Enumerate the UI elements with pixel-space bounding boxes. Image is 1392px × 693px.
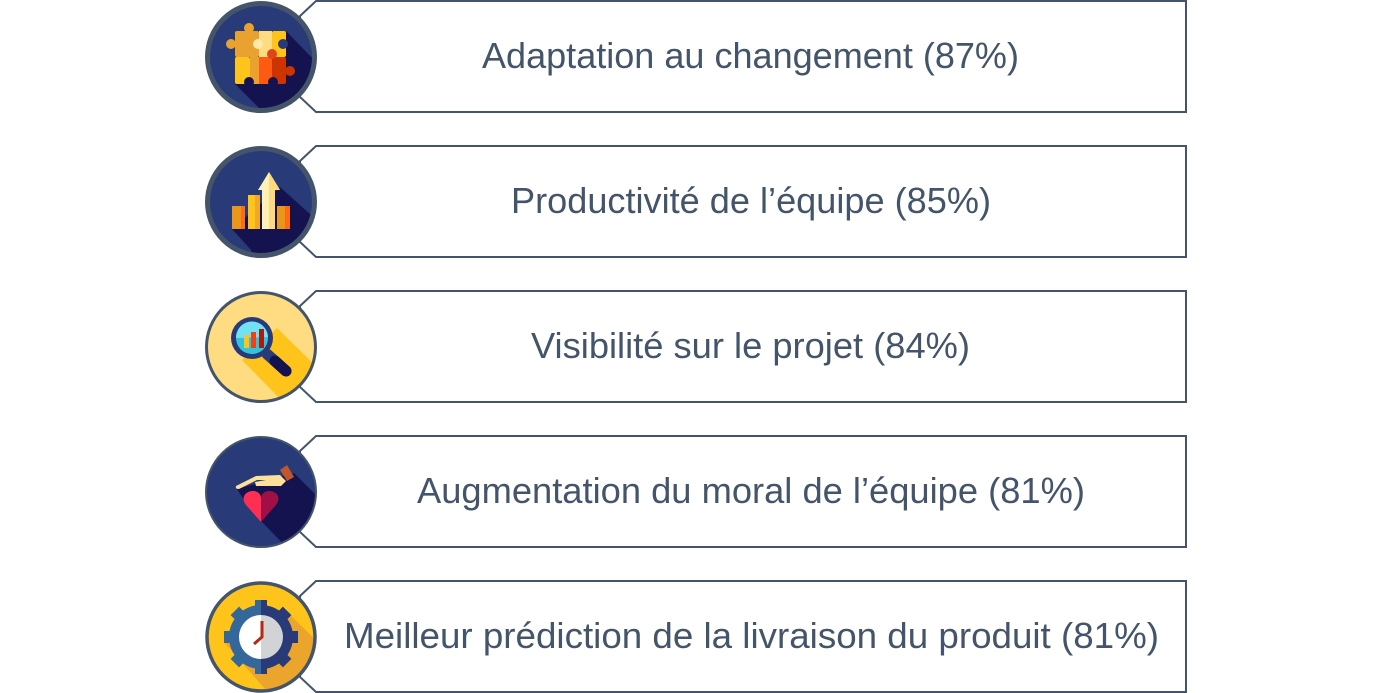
label 1: Adaptation au changement (87%): [482, 35, 1019, 76]
row 2: productivité: [207, 146, 1186, 262]
row 5: prédiction: [207, 581, 1186, 693]
row 4: moral: [206, 436, 1186, 552]
icon: magnifying glass: [206, 292, 321, 407]
label 3: Visibilité sur le projet (84%): [531, 325, 970, 366]
label 2: Productivité de l’équipe (85%): [511, 180, 991, 221]
row 1: adaptation au changement: [207, 1, 1186, 117]
icon: puzzle: [207, 3, 321, 117]
callout box 2: [300, 146, 1186, 257]
callout box 4: [300, 436, 1186, 547]
callout box 1: [300, 1, 1186, 112]
callout box 5: [300, 581, 1186, 692]
icon: bar chart with arrow: [207, 148, 321, 262]
label 4: Augmentation du moral de l’équipe (81%): [417, 470, 1085, 511]
row 3: visibilité: [206, 291, 1186, 407]
callout box 3: [300, 291, 1186, 402]
icon: hand over heart: [206, 437, 321, 552]
icon: gear with clock: [207, 583, 321, 693]
label 5: Meilleur prédiction de la livraison du produit (81%): [344, 615, 1159, 656]
